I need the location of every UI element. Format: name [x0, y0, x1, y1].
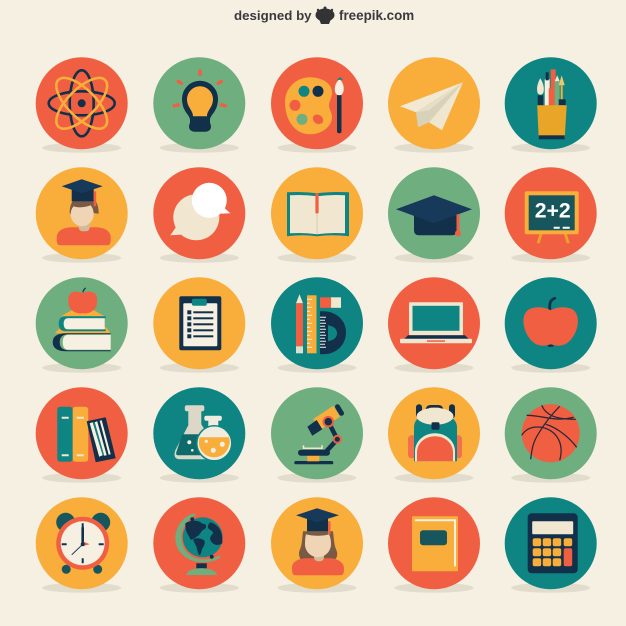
icon tile: microscope — [271, 387, 363, 483]
icon tile: blackboard 2+2: 2+2 — [535, 199, 571, 222]
icon tile: alarm clock — [36, 497, 128, 593]
header: designed by freepik.com: designed by — [234, 8, 312, 23]
icon tile: graduation cap — [388, 167, 480, 263]
icon tile: calculator — [505, 497, 597, 593]
icon tile: paint palette — [271, 57, 363, 153]
icon tile: globe — [153, 497, 245, 593]
icon tile: open book — [271, 167, 363, 263]
icon tile: notebook — [388, 497, 480, 593]
icon tile: ruler, pencil and protractor — [271, 277, 363, 373]
icon tile: apple — [505, 277, 597, 373]
icon tile: blackboard 2+2 — [505, 167, 597, 263]
icon tile: laptop — [388, 277, 480, 373]
icon tile: chemistry flasks — [153, 387, 245, 483]
header: designed by freepik.com: freepik.com — [339, 8, 414, 23]
icon tile: backpack — [388, 387, 480, 483]
icon tile: speech bubbles — [153, 167, 245, 263]
icon: freepik logo — [316, 6, 334, 24]
icon tile: clipboard checklist — [153, 277, 245, 373]
icon tile: male graduate — [36, 167, 128, 263]
icon tile: books and apple — [36, 277, 128, 373]
icon tile: paper plane — [388, 57, 480, 153]
icon tile: light bulb — [153, 57, 245, 153]
icon tile: basketball — [505, 387, 597, 483]
icon tile: pencil cup — [505, 57, 597, 153]
icon tile: row of books — [36, 387, 128, 483]
icon tile: atom — [36, 57, 128, 153]
icon tile: female graduate — [271, 497, 363, 593]
header: designed by freepik.com — [234, 6, 414, 24]
